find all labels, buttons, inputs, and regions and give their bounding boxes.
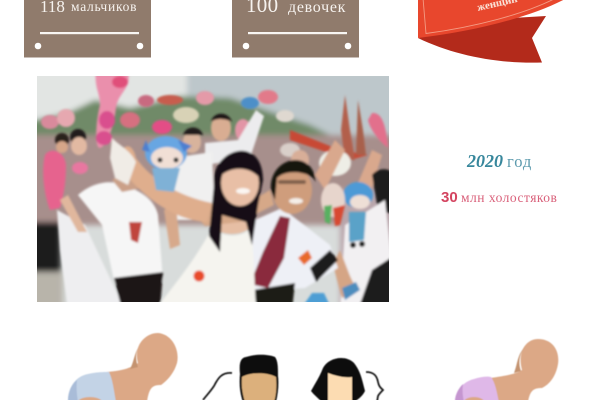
white dress far left (57, 210, 125, 310)
raised bride arm (122, 146, 212, 222)
bride hair and face (209, 151, 263, 252)
background flowers and toys (41, 115, 59, 129)
pink toy left (43, 151, 66, 210)
plaque: 100 girls (232, 0, 359, 58)
right side guest (340, 198, 389, 302)
blue toy right (343, 182, 373, 208)
stat: year 2020: 2020 (466, 151, 503, 171)
stat: year 2020: год (507, 152, 532, 171)
blue plush toy (145, 136, 187, 170)
text: 118 boys (40, 0, 137, 16)
icon: bride head (311, 358, 383, 400)
icon: groom head (203, 355, 278, 400)
man's companion arm (164, 205, 180, 249)
groom body (250, 208, 338, 292)
groom head (272, 166, 312, 214)
text: 100 girls (246, 0, 346, 17)
icon: baby girl with pink diaper (455, 339, 558, 400)
plaque: 118 boys (24, 0, 151, 58)
ribbon banner (418, 0, 567, 63)
background guests (55, 133, 69, 147)
stat: 30 million bachelors: млн холостяков (461, 190, 557, 205)
stat: year 2020 (466, 151, 532, 171)
pink toy held (96, 70, 129, 148)
icon: baby boy with blue diaper (68, 333, 178, 400)
bride dress (158, 229, 258, 302)
photo: mass wedding couple with plush toys (30, 70, 397, 310)
stat: 30 million bachelors: 30 (441, 189, 458, 206)
white-shirt man left (78, 182, 163, 286)
